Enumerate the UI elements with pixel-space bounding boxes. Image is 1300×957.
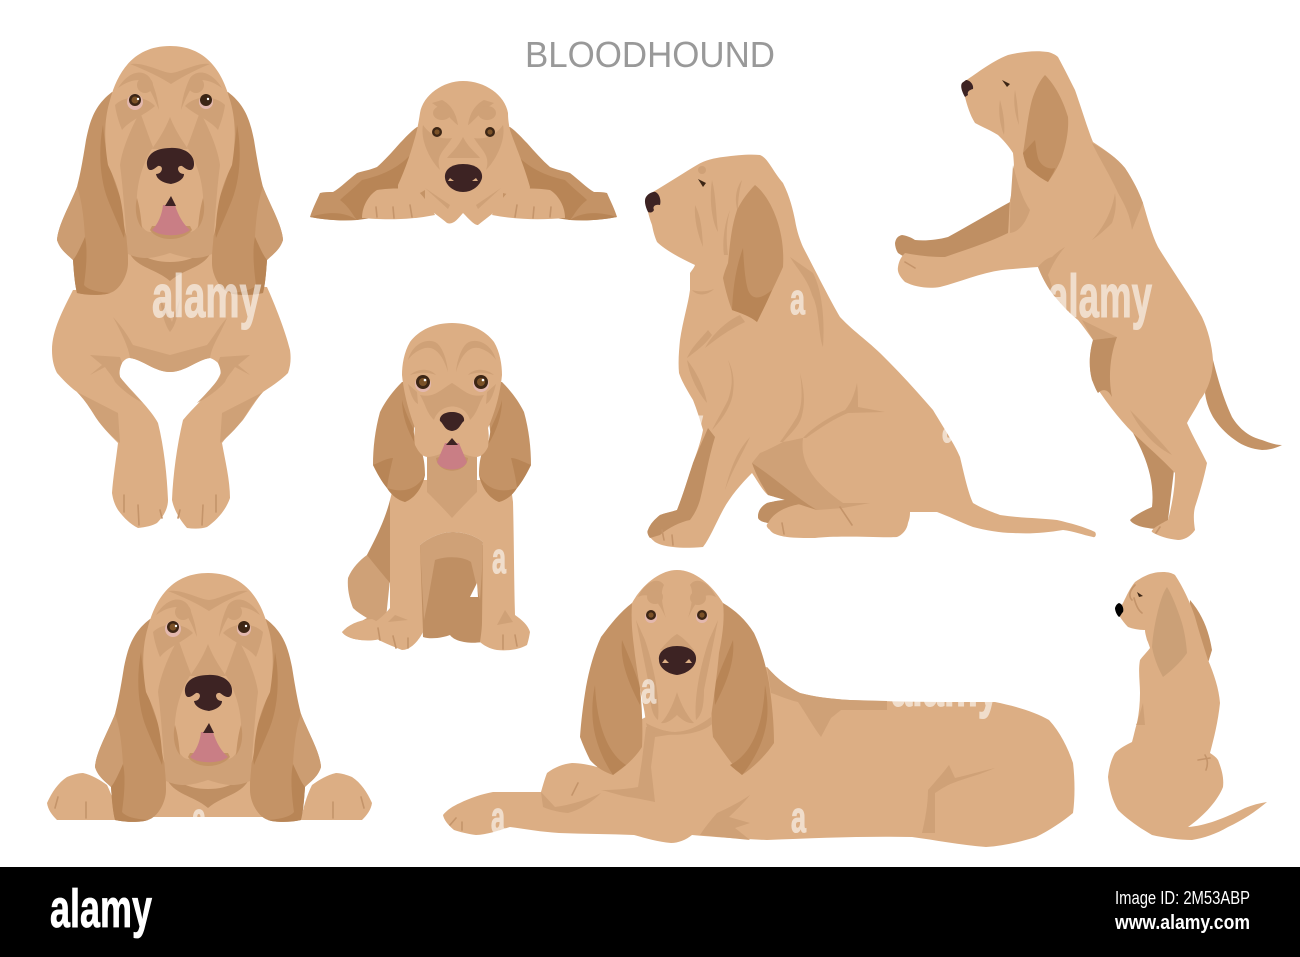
- dog: lying front view, top left: [52, 46, 291, 529]
- ear: [1152, 587, 1187, 677]
- ear: [723, 185, 783, 322]
- far hind leg: [1130, 433, 1175, 529]
- alamy logo: alamy: [50, 879, 152, 939]
- watermarks: a: [942, 403, 957, 452]
- title: BLOODHOUND: [525, 34, 775, 75]
- ear: [1023, 75, 1068, 182]
- dog: sitting puppy, centre: [342, 323, 531, 650]
- puppy head: [402, 323, 502, 457]
- shoulder and belly shadows: [1092, 143, 1143, 230]
- hind leg: [342, 500, 392, 640]
- ears: [580, 603, 655, 775]
- head: [398, 81, 530, 225]
- hind fold: [922, 765, 995, 833]
- watermarks: alamy: [891, 652, 999, 719]
- website: www.alamy.com: [1114, 912, 1250, 934]
- far ear: [1188, 600, 1212, 663]
- hind shadows: [752, 438, 870, 510]
- footer bar: [0, 867, 1300, 957]
- dog: sitting profile, centre right: [645, 155, 1096, 548]
- watermarks: [152, 263, 1152, 843]
- dog: lying side, bottom centre: [443, 570, 1074, 847]
- watermarks: a: [790, 275, 805, 324]
- watermarks: a: [491, 793, 505, 842]
- watermarks: alamy: [1048, 263, 1152, 330]
- chest shadow: [601, 727, 700, 802]
- dog: chin on floor, top centre: [310, 81, 617, 225]
- head: [632, 570, 724, 732]
- front leg shadow: [647, 428, 715, 538]
- paws: [47, 773, 118, 820]
- dog: standing on hind legs, top right: [895, 51, 1282, 540]
- watermarks: alamy: [152, 263, 261, 330]
- watermarks: a: [791, 793, 806, 842]
- watermarks: a: [192, 794, 206, 843]
- far arm: [895, 202, 1012, 262]
- head with ears: [57, 46, 283, 295]
- puppy ears: [373, 382, 425, 502]
- tail: [1205, 360, 1282, 450]
- belly wedge: [700, 795, 750, 840]
- body folds: [780, 373, 885, 442]
- shadow between the legs: [418, 545, 485, 643]
- image id: Image ID: 2M53ABP: [1115, 888, 1250, 908]
- neck shadow: [767, 667, 887, 737]
- body and front legs: [373, 480, 530, 650]
- paw shadow: [541, 792, 601, 813]
- head with ears: [95, 573, 321, 822]
- watermarks: a: [492, 534, 506, 583]
- dog: small back view, bottom right: [1108, 572, 1267, 840]
- ears and paws: [310, 127, 435, 220]
- watermarks: a: [641, 664, 656, 713]
- dog: head with paws, bottom left: [47, 573, 372, 822]
- watermarks: alamy: [595, 394, 703, 461]
